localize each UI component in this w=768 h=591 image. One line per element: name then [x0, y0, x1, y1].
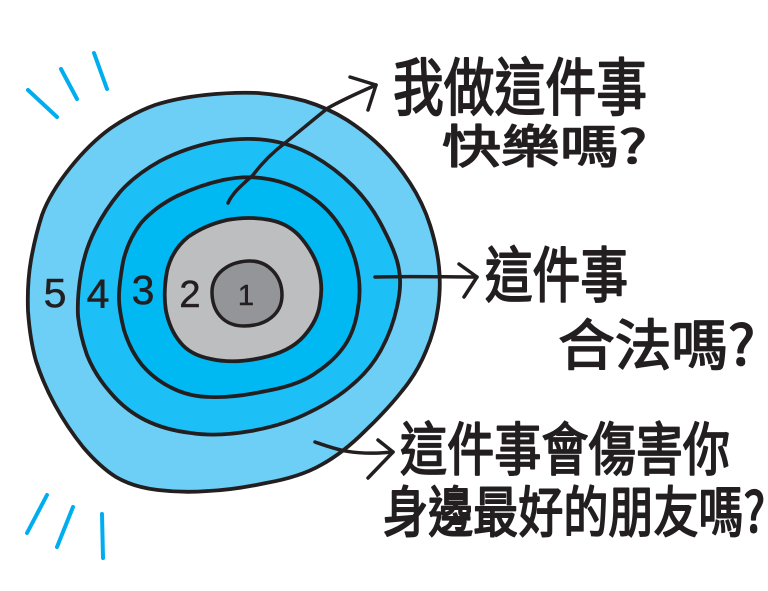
number 2: 2 — [179, 274, 201, 316]
question 3: hurting friends — [383, 405, 765, 549]
question 1: happiness: 快樂嗎? — [442, 111, 647, 177]
number 4: 4 — [87, 271, 109, 317]
ring 3 — [119, 177, 360, 397]
ring 1: centre — [212, 261, 282, 326]
question 3: hurting friends: 這件事會傷害你 — [400, 405, 730, 487]
question 2: legality: 合法嗎? — [558, 302, 755, 382]
ring 5: outermost — [28, 93, 440, 492]
arrow: to legality question — [375, 264, 477, 297]
number 3: 3 — [132, 267, 154, 313]
question 3: hurting friends: 身邊最好的朋友嗎? — [383, 469, 765, 549]
number 5: 5 — [44, 270, 66, 316]
question 2: legality — [485, 227, 755, 382]
emphasis ticks: bottom left — [27, 495, 103, 558]
question 1: happiness — [393, 37, 647, 177]
ring 2 — [165, 218, 321, 361]
emphasis ticks: top left — [28, 53, 107, 117]
question 1: happiness: 我做這件事 — [393, 37, 647, 128]
concentric circle diagram — [28, 93, 440, 492]
question 2: legality: 這件事 — [485, 227, 628, 315]
arrow: to friends question — [315, 440, 393, 478]
ring 4 — [78, 139, 400, 435]
arrow: to happiness question — [228, 77, 376, 203]
number 1: 1 — [238, 280, 254, 312]
